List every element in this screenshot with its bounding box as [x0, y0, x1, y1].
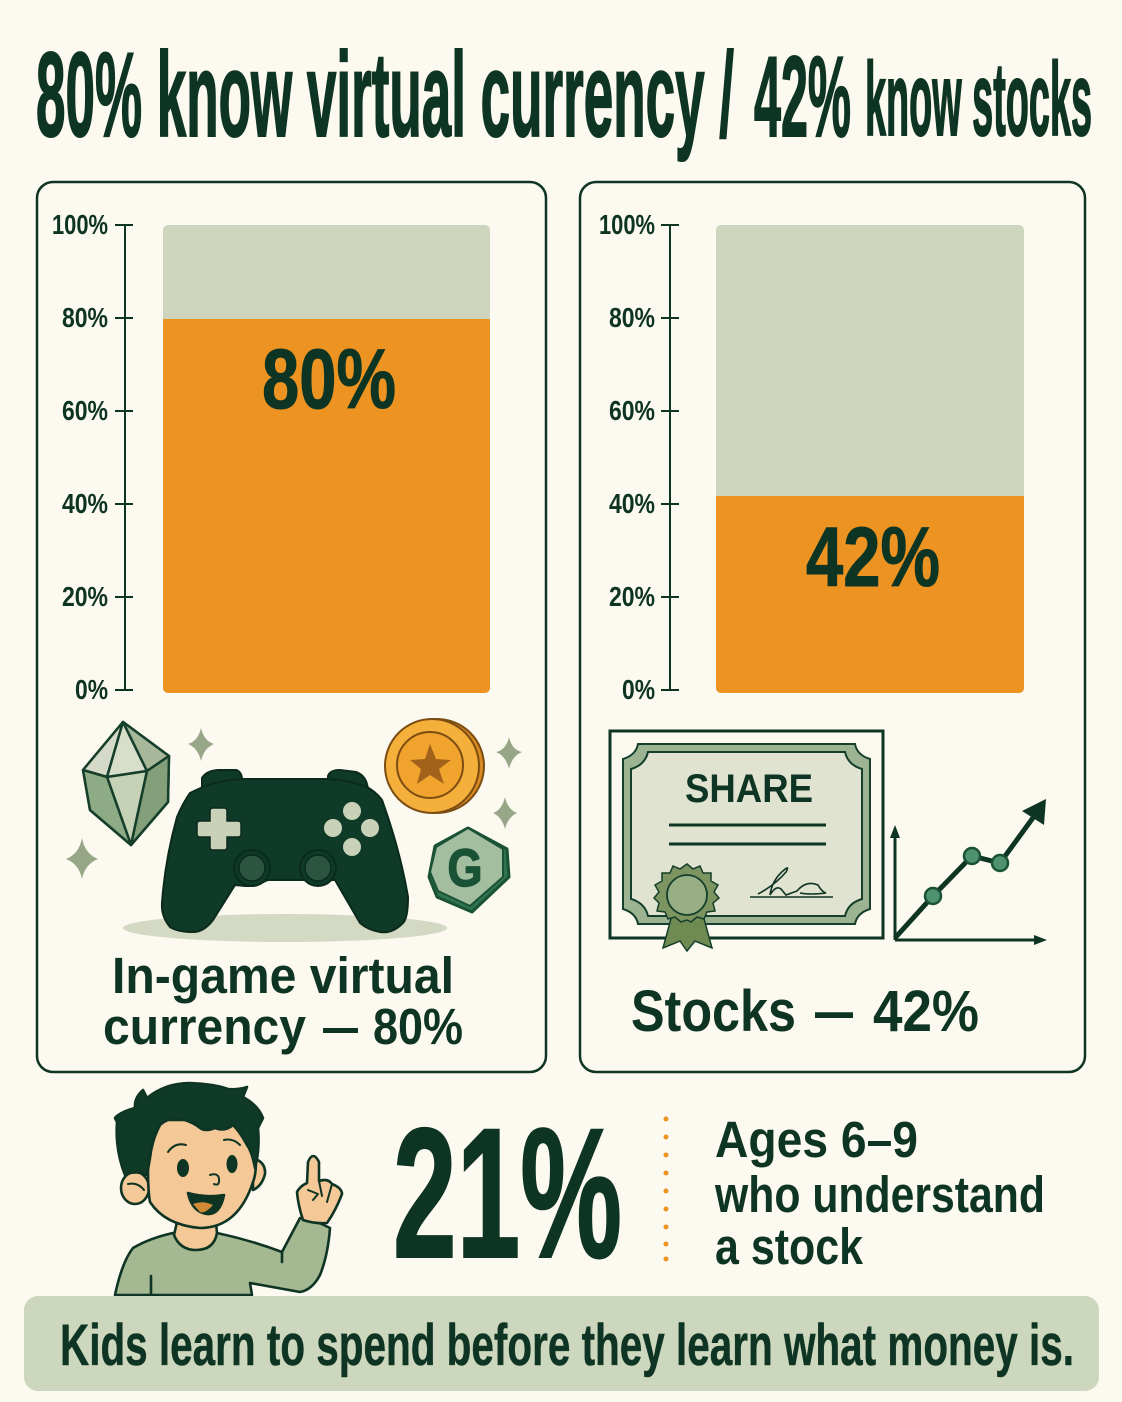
neck — [174, 1222, 217, 1250]
bar chart: 42%: 42% — [806, 510, 940, 604]
axis: right panel — [599, 209, 679, 705]
illustration: boy pointing — [115, 1083, 342, 1295]
axis: left panel: 60% — [62, 395, 108, 426]
label: in-game virtual currency — [103, 947, 463, 1055]
hair — [115, 1083, 263, 1175]
banner — [24, 1296, 1099, 1391]
axis: left panel: 80% — [62, 302, 108, 333]
text: ages 6-9 who understand a stock: who understand — [714, 1166, 1045, 1223]
label: stocks: — — [815, 979, 853, 1044]
axis: right panel: 100% — [599, 209, 655, 240]
panel: stocks — [580, 182, 1085, 1072]
sweater — [115, 1218, 330, 1295]
text: ages 6-9 who understand a stock — [714, 1111, 1045, 1275]
icon: share certificate: SHARE — [685, 767, 813, 811]
axis: left panel: 20% — [62, 581, 108, 612]
divider: dotted — [664, 1116, 668, 1262]
axis: right panel: 80% — [609, 302, 655, 333]
signature — [750, 868, 833, 897]
axis: right panel: 20% — [609, 581, 655, 612]
axis: left panel — [52, 209, 133, 705]
bar chart: 80%: 80% — [262, 332, 396, 426]
panel: in-game virtual currency — [37, 182, 546, 1072]
label: stocks — [631, 979, 979, 1044]
eyes — [177, 1159, 189, 1177]
label: stocks: Stocks — [631, 979, 796, 1044]
hand — [297, 1156, 342, 1223]
mouth — [188, 1193, 224, 1214]
icon: share certificate — [610, 731, 883, 951]
icon: sparkles — [66, 728, 522, 879]
icon: gem — [83, 722, 169, 845]
brows and nose — [128, 1140, 240, 1190]
label: in-game virtual currency: — — [323, 998, 358, 1055]
label: in-game virtual currency: In-game virtual — [112, 947, 454, 1004]
icon: gold coin — [385, 719, 484, 813]
axis: left panel: 100% — [52, 209, 108, 240]
label: in-game virtual currency: currency — [103, 998, 307, 1055]
title: 42% — [754, 34, 851, 161]
label: in-game virtual currency: 80% — [373, 998, 463, 1055]
face — [148, 1120, 256, 1228]
axis: right panel: 40% — [609, 488, 655, 519]
ears — [121, 1172, 149, 1204]
icon: G token — [429, 828, 509, 912]
axis: right panel: 0% — [622, 674, 655, 705]
icon: G token: G — [448, 839, 482, 898]
seal ribbon — [663, 915, 712, 951]
icon: game controller — [123, 770, 447, 942]
axis: left panel: 40% — [62, 488, 108, 519]
stat: 21%: 21% — [393, 1091, 622, 1297]
label: stocks: 42% — [873, 979, 979, 1044]
axis: left panel: 0% — [75, 674, 108, 705]
text: ages 6-9 who understand a stock: a stock — [715, 1218, 864, 1275]
text: ages 6-9 who understand a stock: Ages 6–9 — [715, 1111, 918, 1168]
bar chart: 80% — [163, 225, 490, 693]
bar chart: 42% — [716, 225, 1024, 693]
icon: rising stock chart — [890, 799, 1047, 945]
seal rosette — [654, 864, 719, 922]
axis: right panel: 60% — [609, 395, 655, 426]
